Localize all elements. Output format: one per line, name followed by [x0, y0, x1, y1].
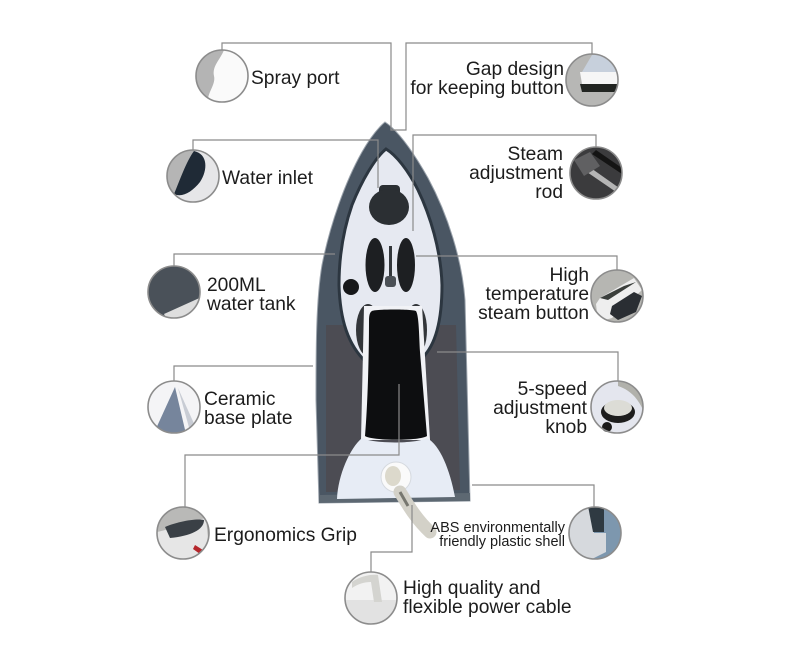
cable socket [381, 462, 411, 492]
callout: 200ML water tank: water tank [206, 294, 296, 315]
callout: ergonomics grip: Ergonomics Grip [214, 525, 357, 546]
callout: ergonomics grip [157, 507, 357, 560]
power cable [400, 492, 430, 532]
callout: ceramic base plate [148, 381, 293, 434]
callout: steam adjustment rod: adjustment [469, 163, 564, 184]
callout: 5-speed adjustment knob: knob [545, 417, 587, 438]
iron white top plate [339, 149, 442, 362]
callout: 5-speed adjustment knob: adjustment [493, 398, 588, 419]
handle [365, 310, 427, 440]
callout: power cable [345, 572, 572, 625]
callout: ABS plastic shell: friendly plastic shell [439, 534, 565, 550]
callout: 5-speed adjustment knob: 5-speed [518, 379, 587, 400]
callout: ABS plastic shell [430, 506, 621, 560]
callout: steam adjustment rod: Steam [508, 144, 563, 165]
callout: 200ML water tank [148, 266, 296, 322]
callout: high temperature steam button: steam button [478, 303, 589, 324]
handle white surround [361, 306, 430, 440]
callout: 5-speed adjustment knob [493, 379, 644, 438]
callout: steam adjustment rod: rod [535, 182, 563, 203]
callout: water inlet [167, 150, 314, 202]
steam buttons [366, 238, 415, 292]
iron outer shell [316, 122, 470, 503]
callout: high temperature steam button: High [550, 265, 589, 286]
callout: ceramic base plate: Ceramic [204, 389, 276, 410]
iron lower panel [326, 325, 460, 492]
callout: spray port [196, 50, 340, 102]
callout: 200ML water tank: 200ML [207, 275, 266, 296]
callout: water inlet: Water inlet [222, 168, 314, 189]
dial [356, 304, 427, 356]
callout: ceramic base plate: base plate [204, 408, 293, 429]
callout: gap design: Gap design [466, 59, 564, 80]
callout: gap design: for keeping button [410, 78, 564, 99]
callout: steam adjustment rod [469, 144, 622, 203]
leader lines [174, 43, 618, 572]
rear cover [337, 438, 455, 499]
callout: power cable: flexible power cable [403, 597, 572, 618]
callout: high temperature steam button: temperature [486, 284, 589, 305]
iron soleplate edge [319, 493, 470, 503]
callout: high temperature steam button [478, 265, 643, 324]
callout: gap design [410, 54, 620, 106]
iron body [316, 122, 470, 532]
callout: power cable: High quality and [403, 578, 541, 599]
callout: ABS plastic shell: ABS environmentally [430, 520, 566, 536]
water inlet cap [369, 185, 409, 225]
spray button [343, 279, 359, 295]
callout: spray port: Spray port [251, 68, 340, 89]
